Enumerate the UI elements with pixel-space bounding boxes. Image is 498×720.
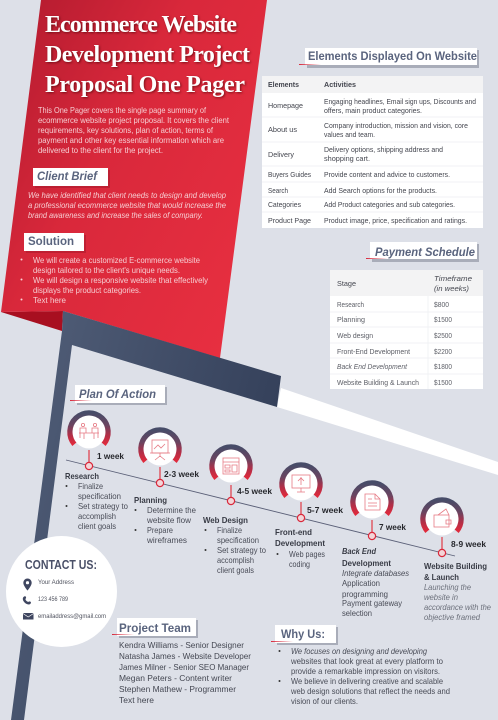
table: elements and activities: shopping cart. xyxy=(324,154,370,163)
timeline step 6: website building and launch xyxy=(423,500,491,622)
table: payment schedule: Stage xyxy=(337,279,356,288)
table: elements and activities: Delivery xyxy=(268,150,294,159)
table: elements and activities: Elements xyxy=(268,80,299,89)
client brief text xyxy=(28,191,227,220)
table: payment schedule: Timeframe xyxy=(434,274,472,283)
icon: wallet xyxy=(434,509,451,527)
client brief text: a professional ecommerce website that would increase the xyxy=(28,201,227,210)
title: Proposal One Pager xyxy=(45,72,245,98)
table: elements and activities: Search xyxy=(268,186,288,195)
why us bullets: We believe in delivering creative and scalable xyxy=(291,677,443,686)
timeline step 2: planning: Planning xyxy=(134,496,167,505)
timeline line xyxy=(66,460,455,556)
timeline step 1: research: accomplish xyxy=(78,512,116,521)
timeline step 5: back end development: Back End xyxy=(342,547,377,556)
title xyxy=(45,12,250,98)
contact circle xyxy=(6,536,117,647)
project team list: Kendra Williams - Senior Designer xyxy=(119,640,244,650)
table: payment schedule: $1500 xyxy=(434,315,452,324)
table: elements and activities xyxy=(262,76,483,228)
solution bullets: displays the product categories. xyxy=(33,286,141,295)
contact circle: CONTACT US: xyxy=(25,558,97,572)
table: elements and activities: Engaging headlines, Email sign ups, Discounts and xyxy=(324,97,476,106)
timeline step 6: website building and launch: accordance with the xyxy=(424,603,491,612)
solution bullets: We will create a customized E-commerce website xyxy=(33,256,201,265)
project team list: Text here xyxy=(119,695,154,705)
timeline step 3: web design: Finalize xyxy=(217,526,242,535)
title: Development Project xyxy=(45,42,250,68)
timeline step 6: website building and launch: website in xyxy=(424,593,458,602)
client brief text: We have identified that client needs to design and develop xyxy=(28,191,227,200)
heading: payment schedule xyxy=(366,242,479,262)
heading: project team xyxy=(112,618,198,638)
contact circle: Your Address xyxy=(38,580,74,586)
intro text: requirements, key solutions, plan of action, terms of xyxy=(38,126,214,135)
table: elements and activities: values and team. xyxy=(324,130,375,139)
table: payment schedule: $2500 xyxy=(434,331,452,340)
heading: solution: Solution xyxy=(28,234,74,248)
timeline step 1: research: Finalize xyxy=(78,482,103,491)
timeline step 5: back end development xyxy=(342,483,409,618)
table: payment schedule xyxy=(330,270,483,389)
intro text: delivered to the client for the project. xyxy=(38,146,163,155)
table: payment schedule: Research xyxy=(337,300,364,309)
timeline step 1: research: 1 week xyxy=(97,451,124,461)
table: elements and activities: Buyers Guides xyxy=(268,170,311,179)
table: elements and activities: Categories xyxy=(268,200,301,209)
solution bullets: Text here xyxy=(33,296,67,305)
timeline step 5: back end development: programming xyxy=(342,590,388,599)
table: payment schedule: (in weeks) xyxy=(434,284,469,293)
icon: presentation board xyxy=(150,440,170,460)
table: elements and activities: Homepage xyxy=(268,101,303,110)
timeline step 6: website building and launch: & Launch xyxy=(424,573,459,582)
icon: phone xyxy=(23,596,31,604)
table: payment schedule: Front-End Development xyxy=(337,347,410,356)
timeline step 5: back end development: 7 week xyxy=(379,522,406,532)
client brief text: brand awareness and increase the sales of company. xyxy=(28,211,203,220)
timeline step 5: back end development: Development xyxy=(342,559,391,568)
timeline step 3: web design: specification xyxy=(217,536,259,545)
icon: map pin xyxy=(23,578,32,590)
table: payment schedule: $2200 xyxy=(434,347,452,356)
solution bullets: We will design a responsive website that effectively xyxy=(33,276,208,285)
heading: payment schedule: Payment Schedule xyxy=(375,245,475,259)
why us bullets: We focuses on designing and developing xyxy=(291,647,427,656)
icon: monitor xyxy=(292,475,310,492)
timeline step 3: web design: Set strategy to xyxy=(217,546,266,555)
timeline step 3: web design: accomplish xyxy=(217,556,254,565)
timeline step 6: website building and launch: Website Building xyxy=(424,562,487,571)
timeline step 6: website building and launch: 8-9 week xyxy=(451,539,486,549)
table: payment schedule: Back End Development xyxy=(337,362,408,371)
table: elements and activities: Add Search options for the products. xyxy=(324,186,437,195)
heading: solution xyxy=(24,233,86,253)
table: payment schedule: $1800 xyxy=(434,362,452,371)
timeline step 4: front-end development: Front-end xyxy=(275,528,312,537)
timeline step 2: planning: 2-3 week xyxy=(164,469,199,479)
table: elements and activities: Activities xyxy=(324,80,356,89)
heading: why us: Why Us: xyxy=(281,627,325,641)
heading: elements displayed on website xyxy=(299,48,479,68)
project team list: James Milner - Senior SEO Manager xyxy=(119,662,249,672)
timeline step 3: web design xyxy=(203,447,272,575)
icon: web layout xyxy=(223,458,239,474)
table: payment schedule: $1500 xyxy=(434,378,452,387)
intro text: payment and other key essential information which are xyxy=(38,136,225,145)
table: elements and activities: About us xyxy=(268,125,297,134)
why us bullets: provide a remarkable impression on visitors. xyxy=(291,667,440,676)
heading: project team: Project Team xyxy=(119,621,191,635)
heading: client brief xyxy=(33,168,110,188)
table: payment schedule: Planning xyxy=(337,315,365,324)
project team list xyxy=(119,640,251,705)
why us bullets: web design solutions that reflect the needs and xyxy=(290,687,450,696)
timeline step 5: back end development: selection xyxy=(342,609,372,618)
timeline step 1: research: specification xyxy=(78,492,121,501)
timeline step 1: research xyxy=(65,413,128,531)
timeline step 5: back end development: Integrate databases xyxy=(342,569,409,578)
timeline step 6: website building and launch: Launching the xyxy=(424,583,471,592)
timeline step 4: front-end development: coding xyxy=(289,560,310,569)
timeline step 6: website building and launch: objective framed xyxy=(424,613,480,622)
table: payment schedule: $800 xyxy=(434,300,449,309)
intro text: This One Pager covers the single page summary of xyxy=(38,106,207,115)
timeline step 2: planning: Determine the xyxy=(147,506,196,515)
table: payment schedule: Website Building & Launch xyxy=(337,378,419,387)
table: elements and activities: Company introduction, mission and vision, core xyxy=(324,121,468,130)
table: elements and activities: Product image, price, specification and ratings. xyxy=(324,216,467,225)
table: elements and activities: Provide content and advice to customers. xyxy=(324,170,450,179)
why us bullets xyxy=(278,647,450,706)
heading: why us xyxy=(271,625,338,645)
red banner panel xyxy=(1,0,267,358)
project team list: Megan Peters - Content writer xyxy=(119,673,232,683)
solution bullets xyxy=(20,256,208,305)
timeline step 1: research: Set strategy to xyxy=(78,502,128,511)
timeline step 2: planning xyxy=(134,430,199,545)
timeline step 5: back end development: Application xyxy=(342,579,380,588)
why us bullets: websites that look great at every platform to xyxy=(290,657,443,666)
timeline step 4: front-end development: Development xyxy=(275,539,325,548)
table: elements and activities: Product Page xyxy=(268,216,311,225)
contact circle: emailaddress@gmail.com xyxy=(38,614,106,620)
timeline step 3: web design: Web Design xyxy=(203,516,248,525)
intro text xyxy=(38,106,230,155)
heading: elements displayed on website: Elements Displayed On Website xyxy=(308,49,477,63)
title: Ecommerce Website xyxy=(45,12,237,38)
timeline step 2: planning: website flow xyxy=(146,516,191,525)
solution bullets: design tailored to the client's unique needs. xyxy=(33,266,180,275)
heading: client brief: Client Brief xyxy=(37,169,98,183)
table: elements and activities: Delivery options, shipping address and xyxy=(324,145,443,154)
navy frame xyxy=(11,311,498,720)
icon: meeting table xyxy=(79,423,99,439)
project team list: Stephen Mathew - Programmer xyxy=(119,684,236,694)
heading: plan of action xyxy=(70,385,167,405)
icon: document xyxy=(365,494,380,510)
timeline step 1: research: client goals xyxy=(78,522,116,531)
timeline step 5: back end development: Payment gateway xyxy=(342,599,403,608)
timeline step 1: research: Research xyxy=(65,472,99,481)
timeline step 4: front-end development: 5-7 week xyxy=(307,505,343,515)
project team list: Natasha James - Website Developer xyxy=(119,651,251,661)
why us bullets: vision of our clients. xyxy=(291,697,358,706)
timeline step 2: planning: Prepare xyxy=(147,526,173,535)
timeline step 2: planning: wireframes xyxy=(146,536,187,545)
icon: envelope xyxy=(23,613,34,620)
timeline step 3: web design: 4-5 week xyxy=(237,486,272,496)
contact circle: 123 456 789 xyxy=(38,597,69,603)
timeline step 3: web design: client goals xyxy=(217,566,254,575)
timeline step 4: front-end development: Web pages xyxy=(289,550,325,559)
intro text: ecommerce website project proposal. It covers the client xyxy=(38,116,230,125)
table: elements and activities: offers, main product categories. xyxy=(324,106,422,115)
timeline step 4: front-end development xyxy=(275,465,343,569)
heading: plan of action: Plan Of Action xyxy=(79,387,156,401)
table: elements and activities: Add Product categories and sub categories. xyxy=(324,200,455,209)
table: payment schedule: Web design xyxy=(337,331,373,340)
